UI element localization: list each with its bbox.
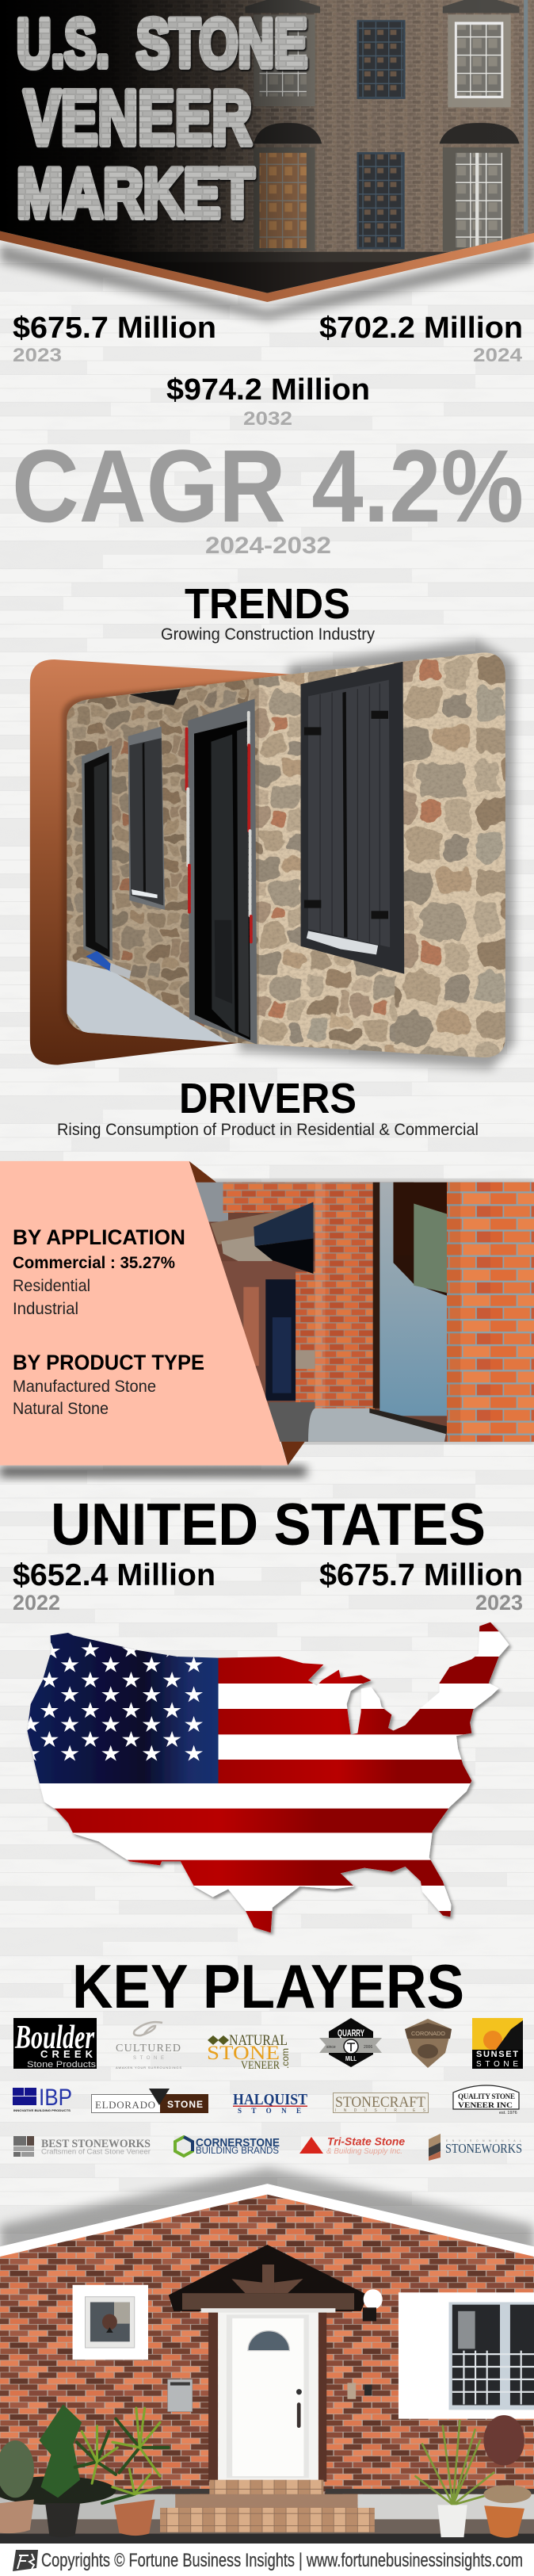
title: U.S. Stone Veneer Market: VENEER (24, 75, 252, 161)
logo: Best Stoneworks (13, 2136, 151, 2157)
logo: Coronado (405, 2019, 452, 2068)
brick building photo (194, 1183, 534, 1442)
stat 2023: $675.7 Million (319, 1558, 523, 1592)
dark camera cluster (129, 689, 181, 705)
heading: drivers (57, 1075, 479, 1139)
logo: Cultured Stone: STONE (133, 2056, 164, 2061)
right window (399, 2292, 534, 2419)
logo: Halquist Stone: HALQUIST (233, 2091, 308, 2108)
flower pots left (0, 2500, 155, 2537)
logo: Cornerstone Building Brands: CORNERSTONE (196, 2136, 280, 2150)
market stats (12, 311, 524, 559)
stat 2023: 2023 (475, 1591, 523, 1615)
stat 2022: $652.4 Million (13, 1558, 216, 1592)
US stats (13, 1558, 523, 1615)
logo: Eldorado Stone (92, 2089, 208, 2113)
porch shadow columns (208, 2310, 326, 2482)
logo: StoneCraft Industries: STONECRAFT (335, 2094, 425, 2111)
far door (82, 745, 113, 961)
logo: Halquist Stone: STONE (238, 2107, 301, 2115)
mailbox (167, 2379, 193, 2412)
logo: Halquist Stone (233, 2091, 308, 2115)
logo: Natural Stone Veneer: STONE (207, 2043, 280, 2064)
logo: IBP: IBP (39, 2085, 72, 2111)
stat 2023: 2023 (13, 345, 62, 366)
roof trim (0, 2184, 534, 2257)
copper backing (30, 659, 293, 1064)
by product type (13, 1351, 204, 1418)
logo: Eldorado Stone: ELDORADO (95, 2099, 155, 2111)
by product type: Natural Stone (13, 1400, 109, 1418)
logo: Quality Stone Veneer (453, 2085, 519, 2115)
logo: The Quarry Mill (319, 2018, 382, 2067)
logo: StoneCraft Industries: INDUSTRIES (335, 2108, 426, 2113)
title: U.S. Stone Veneer Market: U.S. (17, 6, 109, 82)
logo: Natural Stone Veneer: .com (280, 2048, 291, 2069)
logo: Quality Stone Veneer: est. 1976 (499, 2111, 517, 2115)
red stripes (54, 1622, 499, 1932)
logo: Tri-State Stone: & Building Supply Inc. (326, 2147, 402, 2156)
logo: Quality Stone Veneer: QUALITY STONE (458, 2093, 515, 2100)
logo: Tri-State Stone: Tri-State Stone (327, 2135, 405, 2148)
heading: trends: TRENDS (185, 580, 350, 628)
by product type: Manufactured Stone (13, 1378, 156, 1396)
stat 2023 (319, 1558, 523, 1615)
foundation (0, 2489, 534, 2544)
panel: stone wall photo with copper backing (30, 636, 532, 1080)
footer (0, 2544, 534, 2576)
tiled steps (160, 2480, 375, 2532)
lower windows (254, 123, 520, 251)
stat 2024 (319, 311, 523, 366)
title: U.S. Stone Veneer Market: MARKET (17, 154, 254, 232)
by application: Industrial (13, 1300, 78, 1318)
panel: segmentation with brick photo (0, 1161, 534, 1477)
plants right (415, 2415, 532, 2538)
segmentation text (13, 1225, 204, 1418)
logo: The Quarry Mill: MILL (345, 2055, 357, 2062)
logo: Boulder Creek: Boulder (14, 2020, 94, 2056)
intercom (347, 2383, 372, 2399)
paved ground (65, 960, 231, 1044)
by application: Residential (13, 1277, 90, 1295)
large shutter (301, 662, 404, 974)
plants left (0, 2405, 169, 2537)
blue object (86, 951, 131, 979)
logo: IBP (13, 2085, 72, 2112)
copper fold triangles (189, 1161, 305, 1466)
copper chevron band (0, 231, 534, 302)
stat 2022: 2022 (13, 1591, 60, 1615)
heading: drivers: Rising Consumption of Product in Residential & Commercial (57, 1121, 479, 1139)
house facade illustration (0, 2168, 534, 2544)
logo: Tri-State Stone (299, 2135, 405, 2156)
logo: Boulder Creek: CREEK (40, 2048, 93, 2060)
stone wall photo (67, 652, 505, 1057)
flower pots right (437, 2505, 524, 2538)
logo: Eldorado Stone: STONE (167, 2099, 203, 2110)
logo: Quality Stone Veneer: VENEER INC (458, 2101, 513, 2109)
stat 2024: 2024 (473, 345, 522, 366)
logo: Boulder Creek: Stone Products (27, 2060, 97, 2070)
by application: Commercial : 35.27% (13, 1254, 175, 1272)
stat 2023 (13, 311, 216, 366)
small shutter (128, 726, 165, 910)
heading: drivers: DRIVERS (179, 1075, 357, 1122)
stat 2022 (13, 1558, 216, 1615)
stat 2023: $675.7 Million (13, 311, 216, 345)
by product type: BY PRODUCT TYPE (13, 1351, 204, 1374)
stat 2024: $702.2 Million (319, 311, 523, 345)
heading: key players: KEY PLAYERS (72, 1951, 464, 2021)
logo: Sunset Stone: SUNSET (476, 2050, 518, 2059)
peach panel (0, 1161, 288, 1466)
logo: Cultured Stone (116, 2022, 181, 2070)
logo: Natural Stone Veneer (207, 2032, 291, 2072)
logo: IBP: INNOVATIVE BUILDING PRODUCTS (13, 2109, 71, 2112)
stat 2032: $974.2 Million (166, 373, 370, 407)
stat 2032 (166, 373, 370, 430)
logo: Boulder Creek (13, 2018, 97, 2070)
heading: trends (161, 580, 375, 644)
logo: The Quarry Mill: QUARRY (338, 2028, 364, 2039)
heading: united states: UNITED STATES (51, 1491, 486, 1557)
porch lamp (363, 2289, 383, 2322)
logo: Sunset Stone (472, 2018, 523, 2069)
by application (13, 1225, 185, 1318)
central door (188, 699, 257, 1045)
title: U.S. Stone Veneer Market (17, 6, 307, 232)
logo: Cornerstone Building Brands: BUILDING BRANDS (196, 2145, 279, 2156)
logo: Best Stoneworks: Craftsmen of Cast Stone Veneer (41, 2148, 151, 2156)
logo: The Quarry Mill: 2006 (364, 2045, 372, 2050)
logo: Cultured Stone: CULTURED (116, 2043, 181, 2054)
upper windows (245, 0, 520, 107)
logo: Best Stoneworks: BEST STONEWORKS (41, 2138, 151, 2150)
logo: Cornerstone Building Brands (175, 2136, 280, 2156)
logo: Environmental StoneWorks (429, 2134, 522, 2161)
logo: The Quarry Mill: since (326, 2045, 336, 2050)
door surround and door (218, 2310, 318, 2481)
map: United States flag silhouette (21, 1617, 517, 1936)
heading: trends: Growing Construction Industry (161, 625, 375, 644)
logo: Coronado: CORONADO (411, 2031, 446, 2037)
header banner with brick building (0, 0, 534, 320)
left window (73, 2285, 148, 2360)
logo: Natural Stone Veneer: NATURAL (229, 2032, 288, 2049)
logo: Cultured Stone: AWAKEN YOUR SURROUNDINGS (116, 2066, 181, 2070)
logo: Environmental StoneWorks: ENVIRONMENTAL (446, 2139, 521, 2142)
brick wall (0, 2195, 534, 2544)
by application: BY APPLICATION (13, 1225, 185, 1249)
logo: Natural Stone Veneer: VENEER (241, 2059, 280, 2072)
blue canton with stars (27, 1633, 219, 1783)
title: U.S. Stone Veneer Market: STONE (136, 6, 307, 82)
logo: Sunset Stone: STONE (476, 2060, 518, 2069)
CAGR period: 2024-2032 (205, 533, 331, 559)
logos: key players (13, 2018, 523, 2161)
icon: Fortune Business Insights logo (13, 2550, 38, 2571)
building photo (0, 0, 534, 295)
stat 2032: 2032 (243, 408, 292, 430)
red chains (187, 713, 251, 942)
porch roof (169, 2245, 368, 2313)
